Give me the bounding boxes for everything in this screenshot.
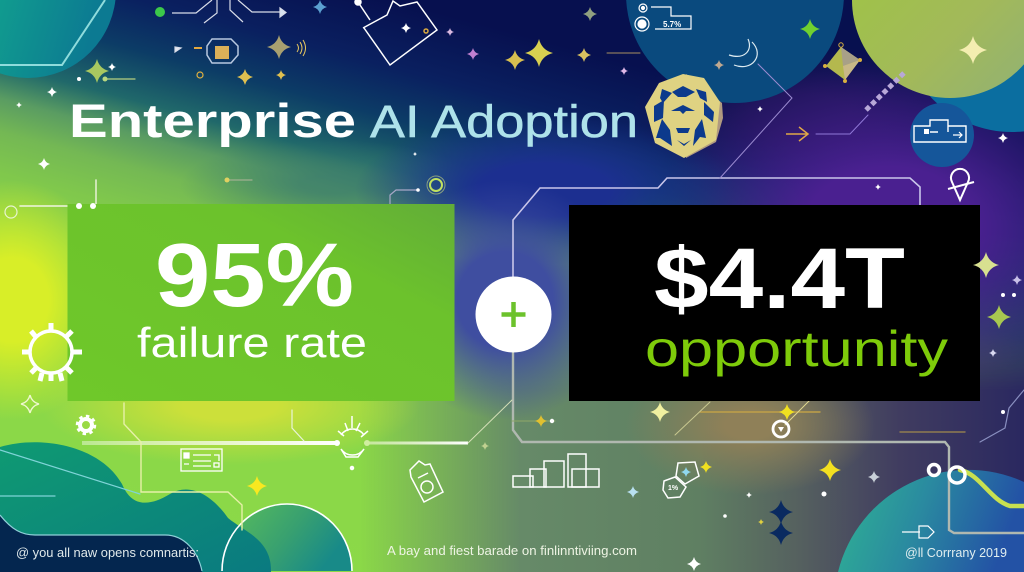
circle: top-left teal xyxy=(0,0,116,78)
icon: dashed arrow xyxy=(902,526,934,538)
icon: crescent moon xyxy=(729,39,757,67)
icon: lightbulb xyxy=(334,416,370,470)
circle: small blue with flow diagram xyxy=(910,103,974,167)
blob: bottom-left teal xyxy=(0,442,271,572)
plus connector xyxy=(476,276,552,352)
icon: sun gear xyxy=(22,323,82,381)
circle: bottom-right teal xyxy=(838,470,1024,572)
icon: target ring top left xyxy=(5,176,445,218)
icon: bar chart xyxy=(513,454,599,487)
title: Enterprise: Enterprise xyxy=(69,94,356,147)
footer centre text: A bay and fiest barade on finlinntiviing.com xyxy=(387,544,637,558)
panel: failure rate xyxy=(68,204,454,401)
icon: chip network top xyxy=(155,0,306,78)
icon: document card xyxy=(181,449,222,471)
icon: gem diamond xyxy=(823,43,862,83)
striped connector xyxy=(866,72,905,110)
label: failure rate: failure rate xyxy=(137,319,367,366)
icon: hexagons: 1% xyxy=(668,485,679,492)
icon: percent flow chart xyxy=(635,4,691,31)
icon: hexagons xyxy=(663,462,699,498)
footer left text: @ you all naw opens comnartis: xyxy=(16,546,199,560)
circle: top-right lime xyxy=(852,0,1024,98)
stat: $4.4T: $4.4T xyxy=(654,231,905,327)
icon: map pin xyxy=(948,169,974,200)
circle: top-centre blue xyxy=(626,0,844,103)
icon: tag xyxy=(410,461,443,502)
blob outline: navy edge xyxy=(0,515,202,571)
circle: top-right blue xyxy=(900,0,1024,132)
icon: white ring target xyxy=(773,421,789,437)
blob: bottom-left navy xyxy=(0,515,202,572)
circle: bottom green fill xyxy=(222,504,352,571)
stat: 95%: 95% xyxy=(155,226,354,326)
circle: bottom green outline xyxy=(222,504,352,571)
icon: percent flow chart: 5.7% xyxy=(663,20,681,29)
title xyxy=(69,94,638,147)
icon: house outline top xyxy=(355,0,437,65)
rings bottom right xyxy=(928,464,965,483)
icon: small gear xyxy=(77,416,95,434)
panel: opportunity xyxy=(569,205,980,401)
icon: lion shield badge xyxy=(645,74,723,158)
label: opportunity: opportunity xyxy=(645,321,948,377)
icon: gold arrow xyxy=(786,127,808,141)
footer right text: @ll Corrrany 2019 xyxy=(905,546,1007,560)
title: AI Adoption: AI Adoption xyxy=(370,96,638,147)
